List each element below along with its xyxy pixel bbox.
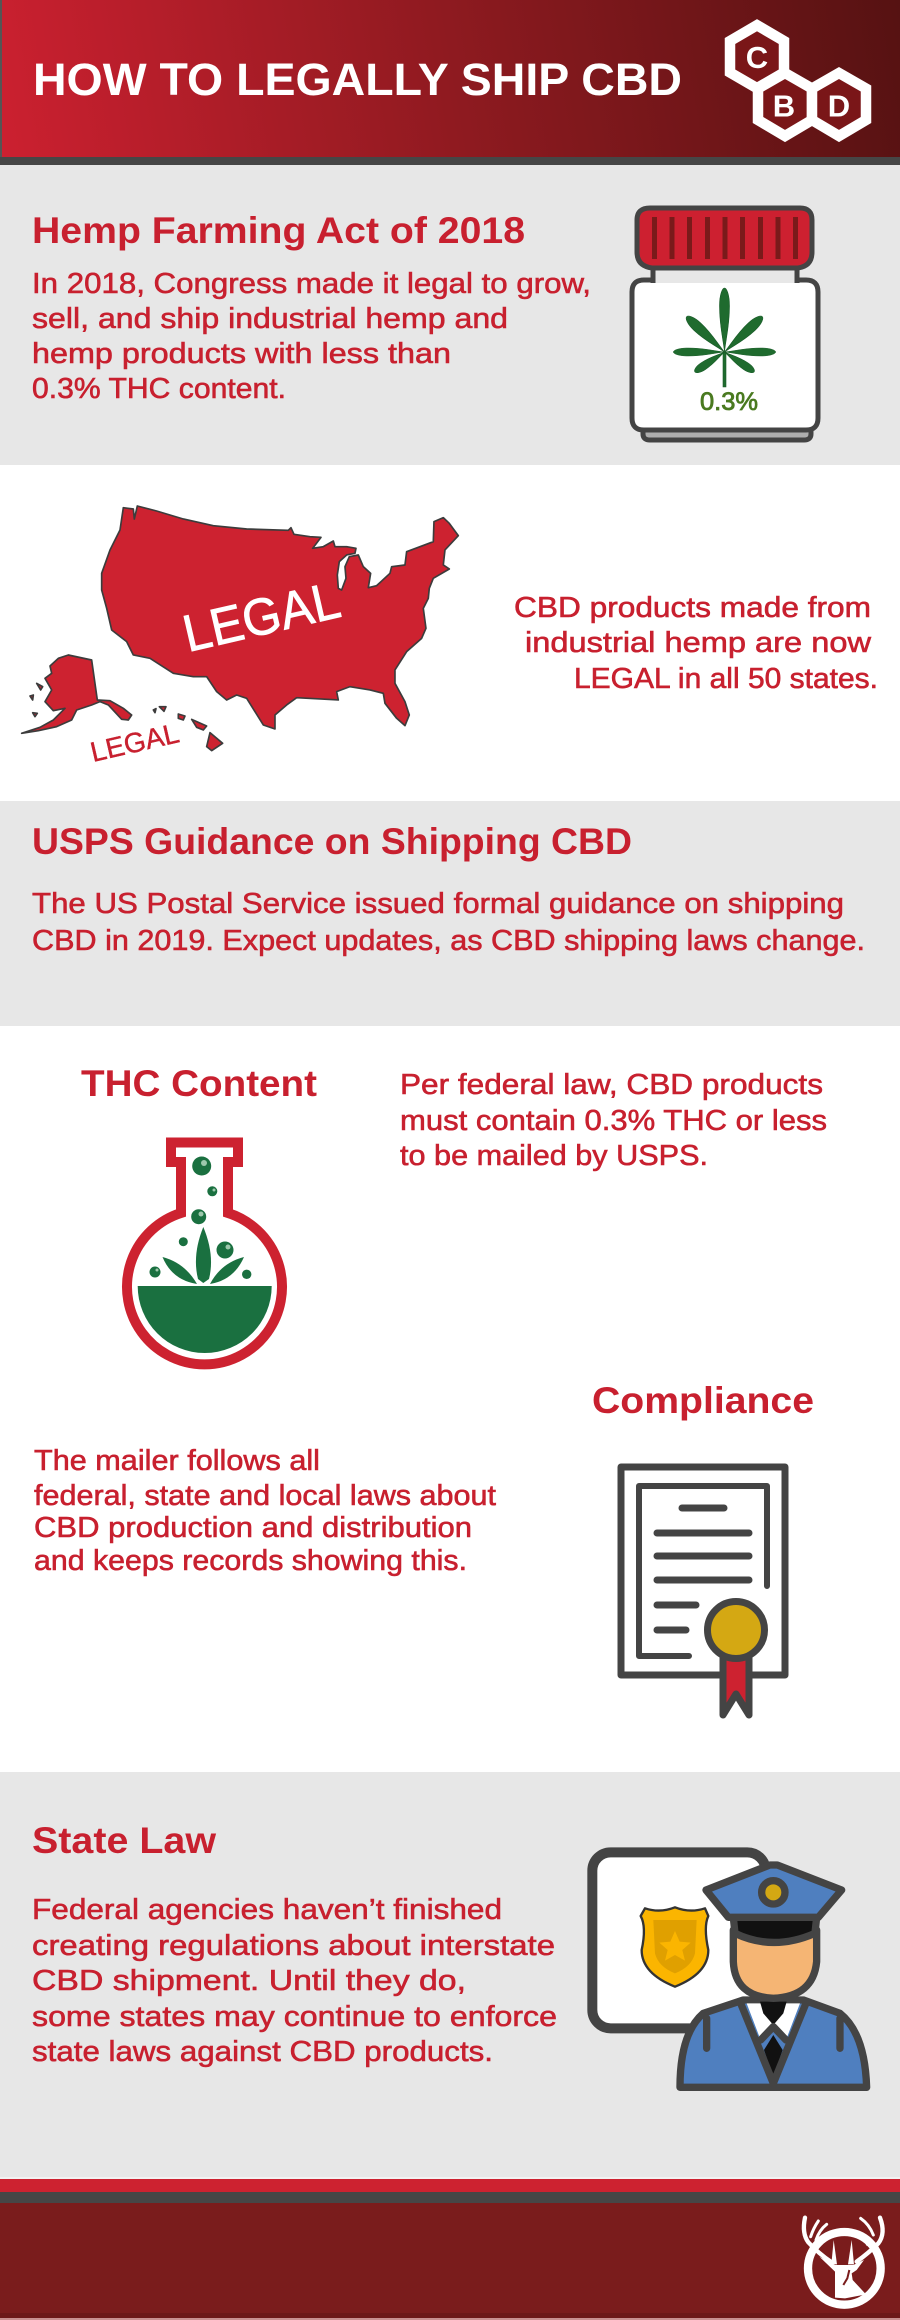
text: state law body: creating regulations about interstate (32, 1930, 555, 1962)
text: USPS guidance body: The US Postal Service issued formal guidance on shipping (32, 888, 844, 920)
text: hemp farming act body: hemp products with less than (32, 338, 451, 370)
label: 0.3%: 0.3% (700, 388, 758, 416)
icon: certificate with seal (621, 1467, 785, 1715)
text: compliance body: The mailer follows all (34, 1445, 320, 1477)
heading: State Law: State Law (32, 1820, 216, 1861)
text: THC content body: to be mailed by USPS. (400, 1140, 708, 1172)
text: hemp farming act body (32, 268, 591, 405)
icon: CBD hexagon logo: B (773, 88, 795, 124)
panel: Hemp Farming Act (0, 165, 900, 465)
label: LEGAL near Alaska and Hawaii: LEGAL (87, 717, 182, 768)
text: hemp farming act body: In 2018, Congress made it legal to grow, (32, 268, 591, 300)
icon: flask with hemp (127, 1142, 282, 1364)
text: state law body: CBD shipment. Until they do, (32, 1965, 466, 1997)
icon: US map with Alaska and Hawaii (22, 506, 458, 768)
icon: jar with hemp leaf (632, 208, 818, 440)
text: compliance body: federal, state and local laws about (34, 1480, 496, 1512)
icon: CBD hexagon logo (730, 25, 866, 136)
heading: USPS Guidance on Shipping CBD: USPS Guidance on Shipping CBD (32, 821, 632, 862)
icon: CBD hexagon logo: C (746, 40, 768, 75)
panel: USPS guidance (0, 801, 900, 1026)
text: state law body: some states may continue to enforce (32, 2001, 557, 2033)
title: HOW TO LEGALLY SHIP CBD (33, 54, 682, 105)
icon: deer head logo (804, 2218, 883, 2305)
text: hemp farming act body: 0.3% THC content. (32, 373, 286, 405)
text: USPS guidance body: CBD in 2019. Expect updates, as CBD shipping laws change. (32, 925, 865, 957)
panel: footer bands (0, 2177, 900, 2320)
icon: CBD hexagon logo: D (828, 88, 850, 124)
text: USPS guidance body (32, 888, 865, 957)
heading: Compliance: Compliance (592, 1380, 814, 1421)
text: THC content body: must contain 0.3% THC or less (400, 1105, 827, 1137)
text: CBD legal in all 50 states (514, 592, 878, 695)
text: state law body: Federal agencies haven’t finished (32, 1894, 502, 1926)
text: THC content body: Per federal law, CBD products (400, 1069, 823, 1101)
text: CBD legal in all 50 states: industrial hemp are now (525, 627, 872, 659)
text: hemp farming act body: sell, and ship industrial hemp and (32, 303, 508, 335)
text: state law body: state laws against CBD products. (32, 2036, 493, 2068)
text: THC content body (400, 1069, 827, 1172)
text: compliance body: CBD production and distribution (34, 1512, 472, 1544)
text: compliance body: and keeps records showing this. (34, 1545, 467, 1577)
text: compliance body (34, 1445, 496, 1577)
heading: Hemp Farming Act of 2018: Hemp Farming Act of 2018 (32, 210, 525, 251)
heading: THC Content: THC Content (81, 1063, 317, 1104)
panel: State Law (0, 1772, 900, 2177)
label: LEGAL on mainland: LEGAL (178, 571, 346, 664)
icon: police officer with badge (592, 1852, 867, 2087)
text: state law body (32, 1894, 557, 2068)
panel: header banner (0, 0, 900, 165)
text: CBD legal in all 50 states: CBD products made from (514, 592, 871, 624)
text: CBD legal in all 50 states: LEGAL in all 50 states. (574, 663, 878, 695)
